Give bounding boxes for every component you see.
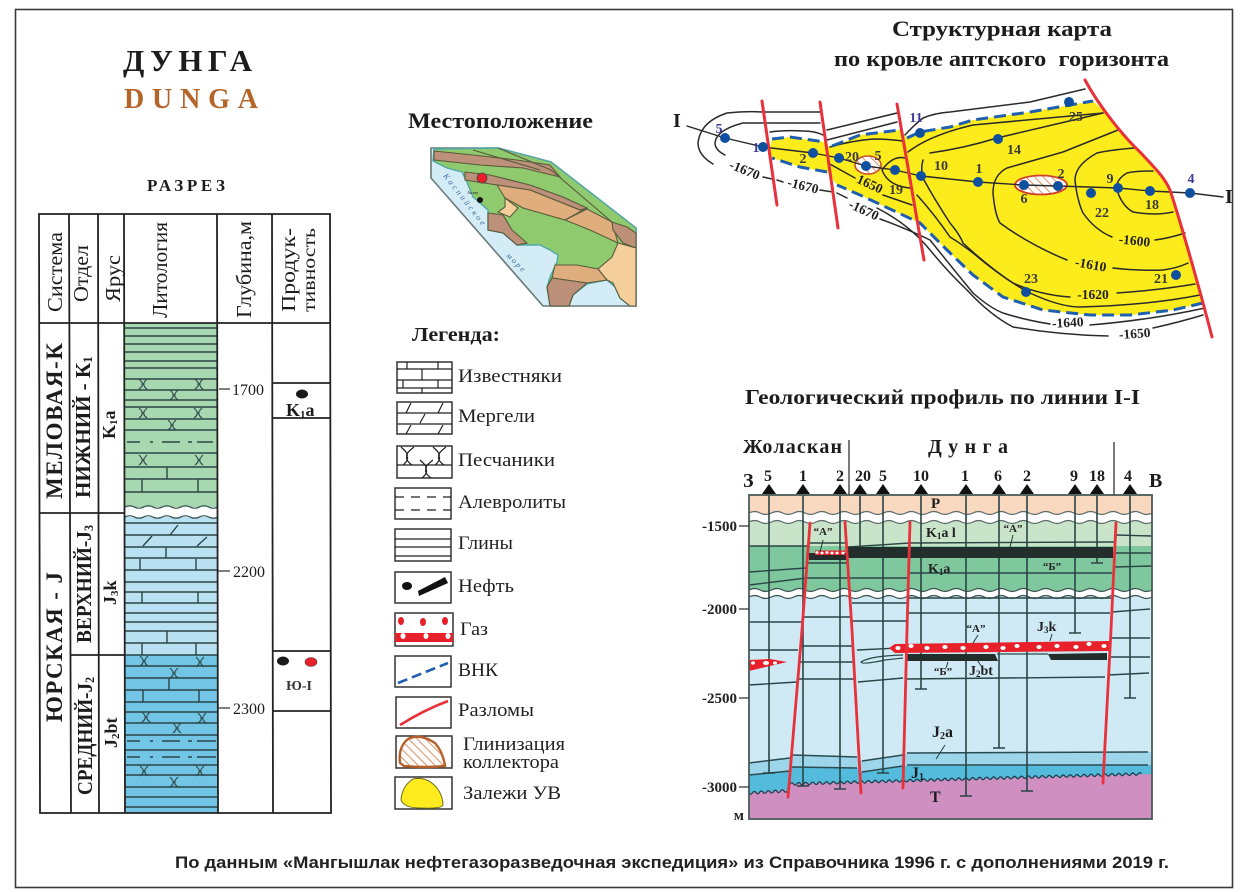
- system / series / stage labels: bt: [101, 717, 121, 734]
- column headers: Ярус: [101, 255, 125, 302]
- section line I-I: [687, 126, 1223, 197]
- well numbers: 19: [889, 183, 903, 198]
- source note: По данным «Мангышлак нефтегазоразведочная экспедиция» из Справочника 1996 г. с дополнениями 2019 г.: [175, 854, 1169, 872]
- legend: faults: Разломы: [458, 700, 534, 721]
- legend: sandstone: Песчаники: [458, 450, 555, 471]
- area names and dividers: З: [743, 470, 754, 492]
- legend: oil: Нефть: [458, 576, 514, 597]
- structural map: [673, 80, 1233, 342]
- well labels: 1: [799, 468, 807, 485]
- productivity marks: K: [286, 400, 300, 420]
- system / series / stage labels: НИЖНИЙ - К: [71, 363, 95, 498]
- well numbers: 9: [1106, 172, 1114, 187]
- layers: [749, 495, 1152, 819]
- legend: clay: [395, 529, 513, 561]
- gas lenses: [749, 550, 1109, 671]
- well numbers: 5: [874, 149, 882, 164]
- strata labels: “Б”: [934, 666, 952, 678]
- thin sand lens: [861, 654, 1048, 663]
- legend: marl: [397, 402, 535, 434]
- heading: structural map: [834, 16, 1169, 71]
- legend: hydrocarbon pools: [395, 777, 561, 809]
- strata labels: 2: [940, 731, 945, 742]
- geological profile: [702, 436, 1162, 824]
- faults: [788, 522, 1116, 797]
- well numbers: 25: [1069, 110, 1083, 125]
- city marker: Актау: [467, 190, 483, 203]
- strata labels: K: [928, 562, 939, 577]
- well labels: 5: [764, 468, 772, 485]
- inner contours: [828, 113, 1103, 205]
- shale-out lenses: [1015, 176, 1067, 194]
- well numbers: 23: [1024, 272, 1038, 287]
- area names and dividers: В: [1149, 470, 1162, 492]
- well numbers: 22: [1095, 206, 1109, 221]
- depth axis: м: [734, 808, 744, 824]
- strata labels: 1: [937, 531, 942, 541]
- legend: [395, 324, 566, 809]
- legend: gas: Газ: [460, 619, 488, 640]
- legend: reservoir shale-out: коллектора: [463, 752, 560, 773]
- well labels: 1: [961, 468, 969, 485]
- well numbers: 5: [716, 122, 722, 137]
- field marker: [477, 173, 487, 183]
- depth scale: 2200: [233, 564, 265, 581]
- column headers: Продук-: [278, 228, 300, 312]
- wells: [763, 495, 1136, 796]
- strata labels: J: [911, 765, 919, 782]
- system / series / stage labels: МЕЛОВАЯ-К: [42, 343, 67, 499]
- system / series / stage labels: 1: [80, 356, 95, 363]
- depth axis: -2000: [702, 602, 737, 618]
- well numbers: 2: [800, 152, 806, 167]
- faults: [762, 80, 1212, 337]
- system / series / stage labels: ВЕРХНИЙ-J: [72, 522, 96, 643]
- outer contours: [698, 89, 1085, 164]
- column headers: Литология: [148, 222, 172, 318]
- contour values: -1650: [1118, 325, 1151, 342]
- table grid: [39, 214, 331, 813]
- well numbers: [716, 110, 1194, 287]
- well numbers: 20: [845, 150, 859, 165]
- legend: limestone: Известняки: [458, 366, 562, 387]
- city marker: Актау: Актау: [467, 190, 479, 195]
- strata labels: “А”: [814, 526, 832, 538]
- strata labels: a: [943, 562, 950, 577]
- legend: water-oil contact: ВНК: [458, 660, 498, 681]
- depth scale: 1700: [232, 382, 264, 399]
- legend: limestone: [397, 362, 562, 393]
- contour values: -1670: [727, 157, 762, 183]
- column headers: Глубина,м: [232, 221, 256, 318]
- well numbers: 4: [1188, 172, 1194, 187]
- heading: Разрез: РАЗРЕЗ: [147, 176, 225, 195]
- well labels: 9: [1070, 468, 1078, 485]
- depth axis: [702, 519, 749, 824]
- contour values: -1640: [1052, 314, 1084, 331]
- well labels: 18: [1089, 468, 1105, 485]
- well numbers: 6: [1020, 192, 1028, 207]
- legend: gas: [395, 613, 488, 646]
- Triassic erosional surface: [749, 773, 1141, 794]
- strata labels: “А”: [1004, 523, 1022, 535]
- system / series / stage labels: K: [99, 425, 119, 439]
- legend: siltstone: Алевролиты: [458, 492, 566, 513]
- legend: water-oil contact: [395, 656, 498, 687]
- heading: geological profile: Геологический профиль по линии I-I: [745, 385, 1140, 409]
- legend: siltstone: [395, 488, 566, 519]
- lithology column: [125, 323, 218, 813]
- heading: structural map: Структурная карта: [892, 16, 1112, 41]
- heading: Местоположение: Местоположение: [408, 108, 593, 133]
- wellhead triangles: [762, 484, 1137, 494]
- system / series / stage labels: a: [99, 410, 119, 419]
- well numbers: 18: [1145, 198, 1159, 213]
- column headers: Система: [43, 231, 67, 312]
- strata labels: P: [931, 496, 940, 512]
- column headers: [43, 221, 319, 318]
- depth scale: [218, 382, 265, 718]
- system / series / stage labels: J: [100, 596, 120, 605]
- sea name: море: [504, 250, 528, 274]
- contour values: -1620: [1077, 287, 1109, 302]
- stratigraphic column: [39, 214, 331, 813]
- strata labels: J: [932, 724, 940, 741]
- strata labels: T: [930, 789, 941, 806]
- well labels: 6: [994, 468, 1002, 485]
- legend: reservoir shale-out: [396, 734, 565, 773]
- depth axis: -2500: [702, 691, 737, 707]
- legend: marl: Мергели: [458, 406, 535, 427]
- profile frame: [749, 495, 1152, 819]
- hydrocarbon pool area: [770, 101, 1203, 315]
- strata labels: J: [969, 664, 976, 679]
- well numbers: 14: [1007, 143, 1021, 158]
- column headers: тивность: [299, 228, 319, 312]
- location map: [431, 148, 636, 306]
- well numbers: 11: [909, 111, 923, 126]
- system / series / stage labels: 2: [82, 677, 97, 683]
- well numbers: 1: [976, 162, 982, 177]
- well labels: 2: [1023, 468, 1031, 485]
- area names and dividers: Жоласкан: [743, 436, 842, 458]
- strata labels: K: [926, 526, 937, 541]
- productivity marks: Ю-I: [286, 679, 312, 694]
- well labels: 20: [855, 468, 871, 485]
- contour values: -1670: [846, 196, 882, 223]
- section line ends: I: [1225, 186, 1233, 208]
- system / series / stage labels: ЮРСКАЯ - J: [42, 572, 67, 722]
- productivity marks: a: [306, 400, 315, 420]
- section line ends: [673, 110, 1233, 208]
- wells: [720, 97, 1195, 297]
- J2a and J1 boundaries: [749, 752, 1148, 775]
- oil layers: [809, 547, 1113, 661]
- productivity marks: 1: [300, 409, 306, 421]
- contour values: 1650: [854, 171, 886, 197]
- strata labels: a: [945, 724, 953, 741]
- well labels: 10: [913, 468, 929, 485]
- legend: sandstone: [397, 446, 555, 478]
- title: Дунга: [123, 43, 259, 115]
- geological zones: [434, 148, 636, 306]
- water-oil contact: [772, 101, 1203, 315]
- sea: [431, 148, 636, 306]
- strata labels: J: [1037, 620, 1044, 635]
- strata labels: k: [1048, 620, 1056, 635]
- system / series / stage labels: 3: [81, 525, 96, 531]
- well numbers: 21: [1154, 272, 1168, 287]
- system / series / stage labels: J: [101, 739, 121, 748]
- strata labels: “Б”: [1043, 561, 1061, 573]
- area names and dividers: Дунга: [928, 436, 1008, 458]
- contour values: [727, 157, 1151, 342]
- title: Дунга: DUNGA: [124, 84, 259, 115]
- strata labels: bt: [980, 664, 993, 679]
- title: Дунга: ДУНГА: [123, 43, 253, 78]
- productivity marks: [277, 390, 317, 694]
- legend: oil: [395, 572, 514, 603]
- legend: hydrocarbon pools: Залежи УВ: [463, 783, 561, 804]
- legend: faults: [396, 697, 534, 728]
- well numbers: 1: [752, 141, 760, 156]
- legend: clay: Глины: [458, 533, 513, 554]
- legend: reservoir shale-out: Глинизация: [463, 734, 565, 755]
- depth axis: -1500: [702, 519, 737, 535]
- land: [433, 148, 636, 306]
- system / series / stage labels: 2: [110, 733, 122, 739]
- well labels: 2: [836, 468, 844, 485]
- strata labels: a l: [941, 526, 956, 541]
- strata labels: 1: [939, 567, 944, 577]
- well numbers: 10: [934, 159, 948, 174]
- strata labels: 2: [976, 669, 981, 679]
- sea name: Каспийское: [441, 171, 488, 227]
- sea name: [441, 171, 528, 274]
- strata labels: [814, 496, 1061, 806]
- legend heading: Легенда:: [412, 324, 500, 346]
- system / series / stage labels: [42, 343, 122, 795]
- contour values: -1600: [1118, 231, 1151, 250]
- well labels: 5: [879, 468, 887, 485]
- strata labels: 1: [919, 772, 924, 783]
- well labels: 4: [1124, 468, 1132, 485]
- area names and dividers: [743, 436, 1162, 495]
- system / series / stage labels: 1: [108, 419, 120, 425]
- system / series / stage labels: СРЕДНИЙ-J: [73, 672, 97, 795]
- system / series / stage labels: 3: [109, 590, 121, 596]
- heading: structural map: по кровле аптского горизонта: [834, 46, 1169, 71]
- depth axis: -3000: [702, 780, 737, 796]
- well numbers: 2: [1058, 167, 1064, 182]
- strata labels: 3: [1044, 625, 1049, 635]
- contour values: -1610: [1074, 254, 1108, 275]
- depth scale: 2300: [233, 701, 265, 718]
- horizon lines: [749, 535, 1152, 685]
- section line ends: I: [673, 110, 681, 132]
- column headers: Отдел: [69, 245, 93, 302]
- strata labels: “А”: [967, 623, 985, 635]
- system / series / stage labels: k: [100, 580, 120, 590]
- contour values: -1670: [786, 175, 820, 197]
- well labels: [764, 468, 1132, 485]
